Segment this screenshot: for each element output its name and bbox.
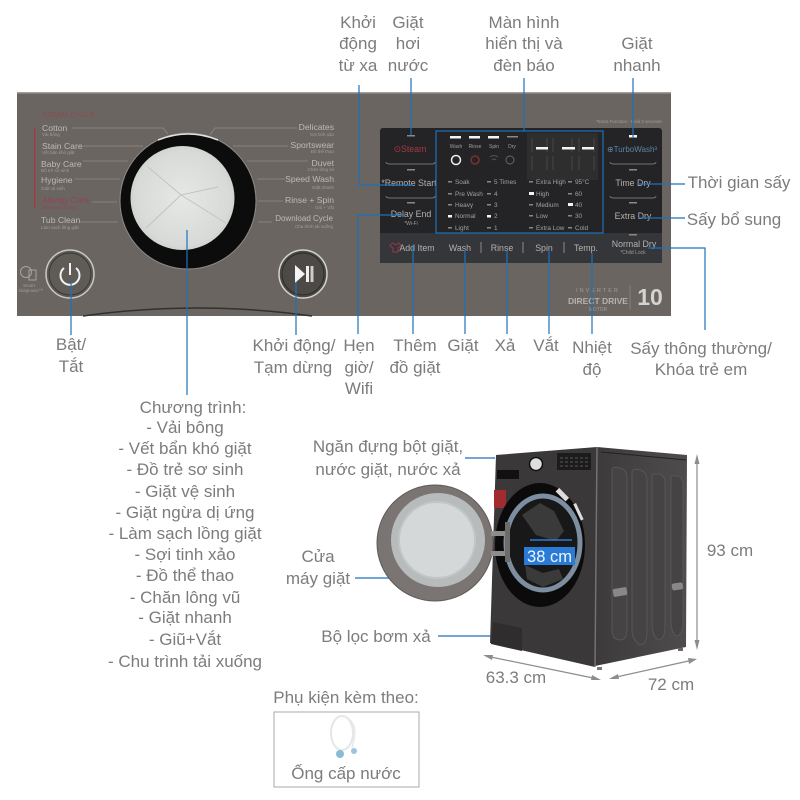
accessory box [274,712,419,787]
program list text: - Giũ+Vắt [149,630,221,649]
label: height: 93 cm [707,541,753,560]
label: remote start: động [339,34,377,53]
inverter badge: 10 [637,284,663,310]
option grids: 40 [575,202,583,209]
left buttons [381,135,437,227]
label: display: hiển thị và [485,34,563,53]
labels below panel [56,335,772,398]
option grids: 2 [494,213,498,220]
option grids: Low [536,213,548,220]
program list right: Speed Wash [285,174,334,184]
program list right: Rinse + Spin [285,195,334,205]
program list left: Giặt ngừa dị ứng [42,205,77,210]
program list text: - Chăn lông vũ [130,588,240,607]
label: remote start: Khởi [340,13,376,32]
program list right: Đồ thể thao [311,148,334,154]
label: inner diameter: 38 cm [527,548,572,566]
label: delay wifi: giờ/ [344,358,374,377]
machine door opening [495,483,585,607]
heading labels top [339,13,661,75]
right buttons: ⊕TurboWash³ [607,145,657,154]
program list left: Giặt vệ sinh [41,186,65,191]
label: delay wifi: Wifi [345,379,373,398]
program list right: Chăn lông vũ [307,167,334,172]
option grids: Soak [455,179,470,186]
icon: smart diagnosis: Smart [23,283,36,288]
label: extra dry: Sấy bổ sung [687,210,781,229]
label: power: Bật/ [56,335,86,354]
program list left: Vải bông [42,132,60,137]
bottom strip buttons: Temp. [574,243,598,253]
label: display: Màn hình [489,13,559,32]
label: turbowash: Giặt [621,34,653,53]
option grids: 1 [494,225,498,232]
label: delay wifi: Hẹn [343,336,375,355]
bottom strip buttons: Wash [449,243,471,253]
label: door: Cửa [301,547,335,566]
program list text: - Vải bông [146,418,224,437]
label: time dry: Thời gian sấy [688,173,791,192]
label: add item: Thêm [393,336,437,355]
option grids: Pre Wash [455,191,483,198]
option grids: Medium [536,202,559,209]
label: steam: Giặt [392,13,424,32]
program list text: - Giặt vệ sinh [135,482,235,501]
machine side [595,447,687,666]
bottom strip buttons: Rinse [491,243,513,253]
icon: smart diagnosis [19,266,43,293]
program list right [210,122,335,229]
program list left [34,110,168,230]
option grids: 95°C [575,178,590,186]
icon: smart diagnosis: Diagnosis™ [19,288,43,293]
bottom strip buttons: Spin [535,243,553,253]
label: normal dry child lock: Khóa trẻ em [655,360,747,379]
machine door [377,485,493,601]
program list text: - Đồ thể thao [136,566,234,585]
status indicators: Dry [508,144,516,150]
label: remote start: từ xa [339,56,378,75]
program list text: Chương trình: [140,398,246,417]
option grids: 3 [494,202,498,209]
inverter badge: MOTOR [589,307,608,313]
digital display [532,138,594,170]
program list left: Cotton [42,123,68,133]
option grids: Light [455,225,469,232]
program list left: Làm sạch lồng giặt [41,225,80,230]
label: display: đèn báo [493,56,555,75]
leader lines [71,78,705,636]
option grids [448,178,590,232]
right buttons: *Child Lock [620,250,646,256]
inverter badge: INVERTER [576,288,620,294]
label: turbowash: nhanh [613,56,661,75]
status indicators: Wash [450,144,463,150]
program list right: Download Cycle [275,214,334,223]
program list left: Allergy Care [42,195,90,205]
label: detergent drawer: Ngăn đựng bột giặt, [313,437,463,456]
status indicators: Spin [489,144,499,150]
program list left: Đồ trẻ sơ sinh [41,168,70,173]
program list left: Stain Care [42,141,83,151]
option grids: Normal [455,213,476,220]
program list right: Chu trình tải xuống [295,224,333,229]
label: wash: Giặt [447,336,479,355]
inverter badge [568,119,663,313]
right buttons [607,135,657,256]
label: spin: Vắt [533,336,559,355]
panel: control panel [17,92,671,316]
inverter badge: *Extra Function : Hold 3 seconds [596,119,663,124]
left buttons: Delay End [391,209,431,219]
label: add item: đồ giặt [389,358,441,377]
icon: power button [46,250,94,298]
program list text: - Chu trình tải xuống [108,652,262,671]
program list text: - Giặt nhanh [138,608,232,627]
option grids: Heavy [455,202,474,209]
label: accessories heading: Phụ kiện kèm theo: [273,688,419,707]
program list text: - Làm sạch lồng giặt [108,524,262,543]
program list text: - Đồ trẻ sơ sinh [127,460,243,479]
washing machine [377,447,687,670]
program list right: Delicates [299,122,334,132]
program list left: Baby Care [41,159,82,169]
option grids: Cold [575,225,589,232]
program list text: - Sợi tinh xảo [135,545,235,564]
label: width: 72 cm [648,675,694,694]
option grids: 5 Times [494,179,516,186]
right buttons: Time Dry [615,178,651,188]
status indicators: Rinse [469,144,482,150]
left buttons: *Wi-Fi [404,221,418,227]
label: start pause: Khởi động/ [253,336,336,355]
label: start pause: Tạm dừng [254,358,332,377]
option grids: 60 [575,191,583,198]
inverter badge: DIRECT DRIVE [568,296,628,306]
label: normal dry child lock: Sấy thông thường/ [630,339,772,358]
program list right: Sportswear [291,140,334,150]
program list right: Giũ + Vắt [315,204,335,210]
option grids: 30 [575,213,583,220]
icon: start pause button [279,250,327,298]
option grids: 4 [494,191,498,198]
program list right: Duvet [312,158,335,168]
label: water hose: Ống cấp nước [291,763,401,783]
program list right: Giặt nhanh [312,185,334,190]
label: drain filter: Bộ lọc bơm xả [321,627,431,646]
option grids: Extra High [536,179,566,186]
left buttons: *Remote Start [381,178,437,188]
bottom strip buttons [390,242,598,253]
status indicators [450,136,518,164]
label: depth: 63.3 cm [486,668,546,687]
program list text: - Giặt ngừa dị ứng [116,503,254,522]
program list left: Tub Clean [41,215,81,225]
label: power: Tắt [59,357,84,376]
option grids: Extra Low [536,225,565,232]
program list left: STEAM CYCLE [42,110,95,119]
option grids: High [536,191,550,198]
right buttons: Extra Dry [615,211,652,221]
icon: water hose [331,716,357,758]
program list left: Vết bẩn khó giặt [42,149,75,155]
machine front [490,447,597,667]
label: door: máy giặt [286,569,350,588]
label: temperature: Nhiệt [572,338,612,357]
program list left: Hygiene [41,175,73,185]
dimension arrows [483,454,700,680]
label: steam: nước [388,56,429,75]
right buttons: Normal Dry [612,239,657,249]
left buttons: ⊙Steam [394,144,426,154]
bottom strip buttons: Add Item [399,243,435,253]
label: temperature: độ [583,360,601,379]
program list right: Sợi tinh xảo [310,132,334,137]
label: rinse: Xả [495,336,516,355]
label: steam: hơi [396,34,420,53]
program list text: - Vết bẩn khó giặt [118,439,252,458]
dial [120,133,256,269]
display panel [380,128,662,263]
label: detergent drawer: nước giặt, nước xả [315,460,461,479]
